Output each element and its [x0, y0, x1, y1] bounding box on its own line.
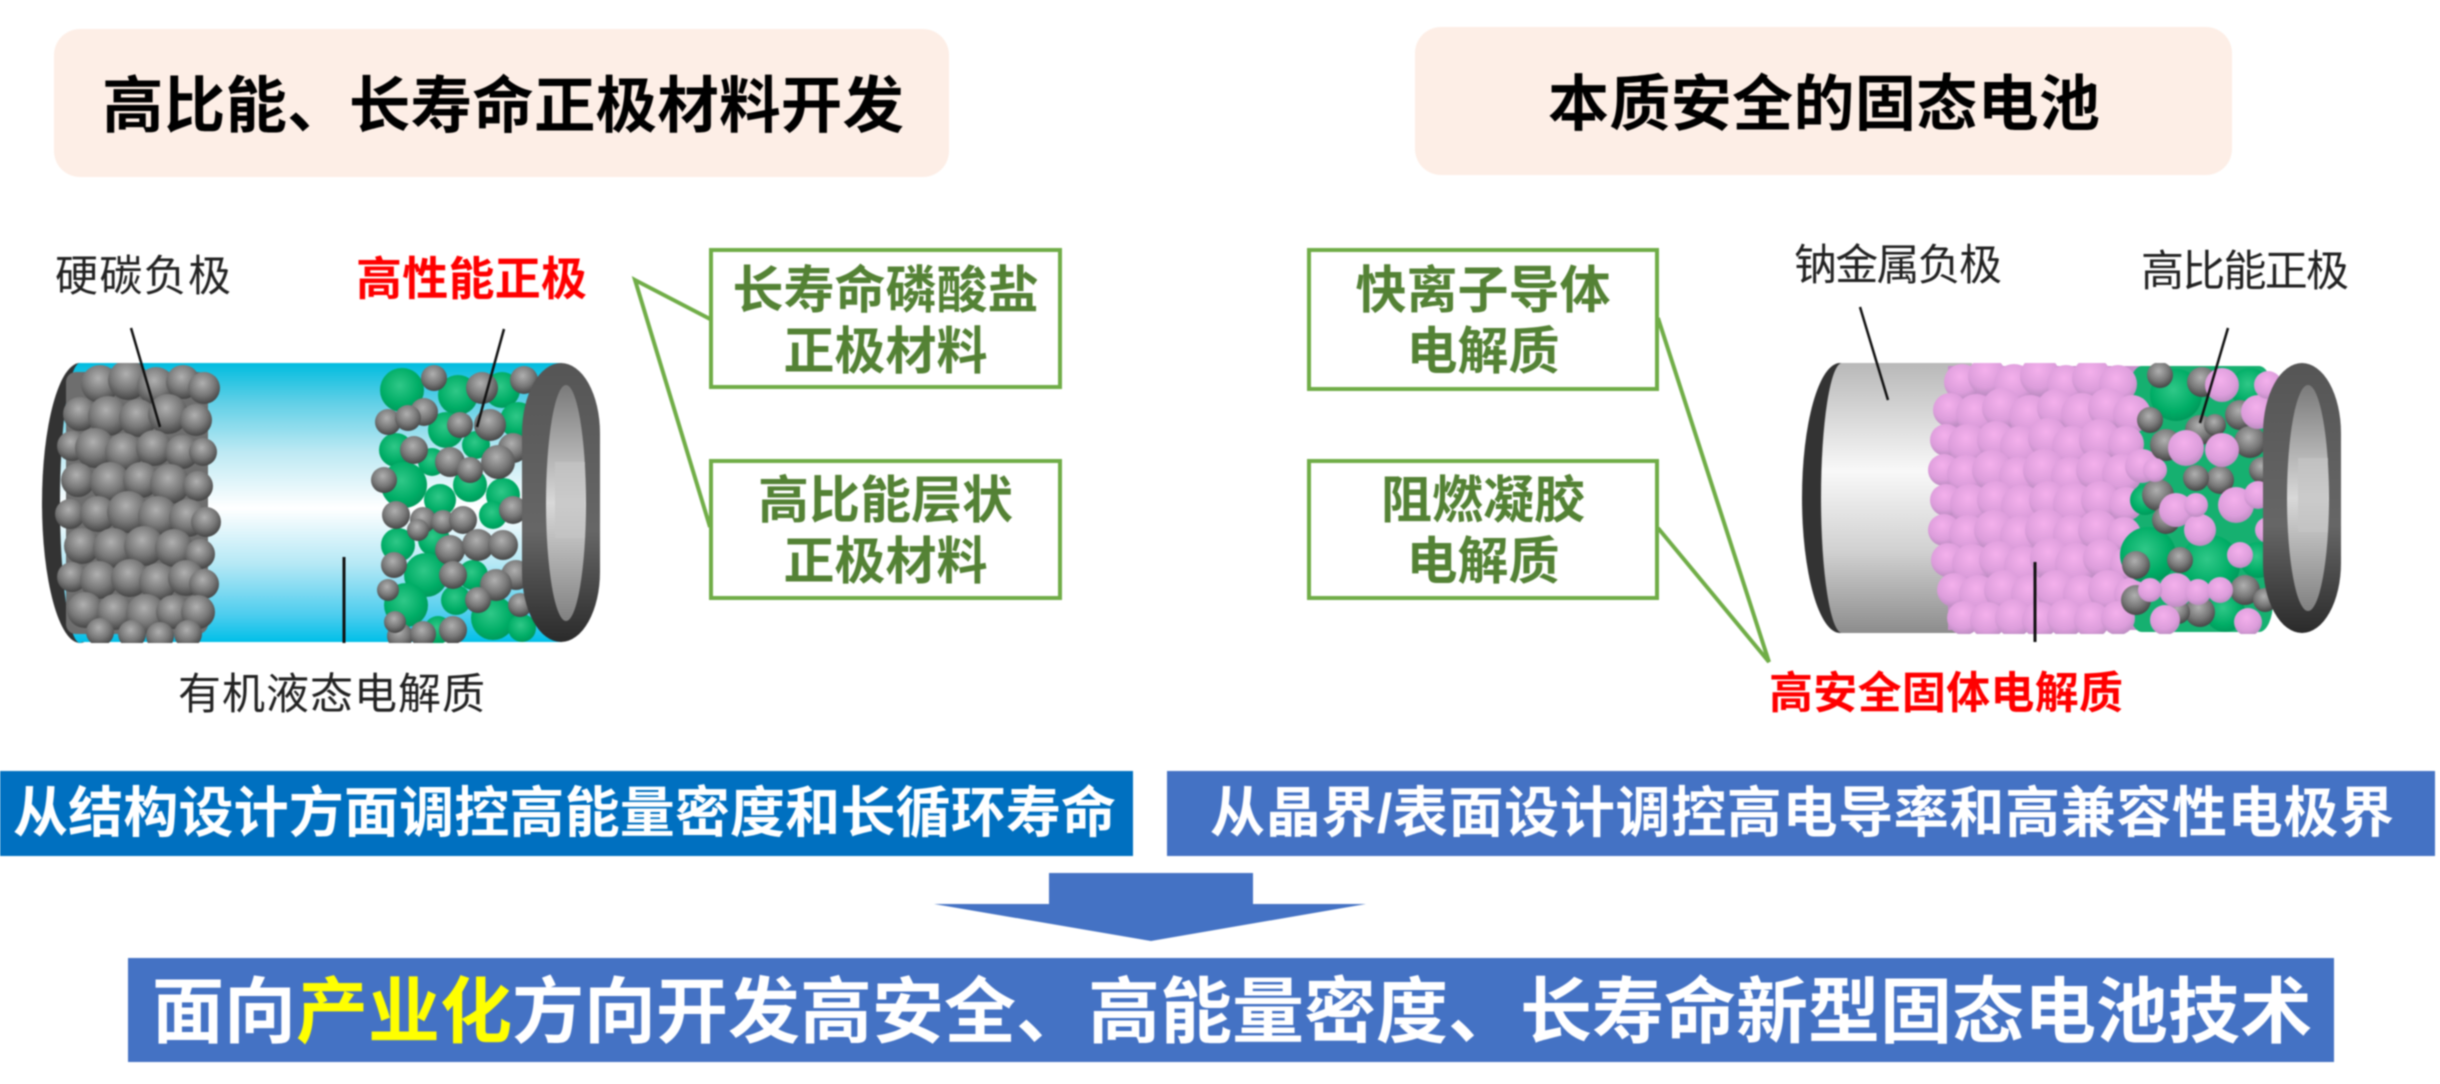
solid electrolyte particles: [1928, 356, 2159, 638]
battery left rim: [42, 363, 118, 643]
leader: solid electrolyte: [2034, 562, 2036, 642]
cathode particles: grey: [371, 365, 538, 649]
label: high specific energy cathode: 高比能正极: [2141, 248, 2349, 296]
label: hard carbon anode: 硬碳负极: [55, 253, 231, 301]
label: organic liquid electrolyte: 有机液态电解质: [178, 671, 485, 719]
callout: layered cathode: [711, 461, 1060, 598]
callout: phosphate cathode: 长寿命磷酸盐: [732, 262, 1039, 319]
callout: flame-retardant gel: [1309, 461, 1657, 598]
composite cathode backing: [2128, 366, 2273, 632]
label: high-safety solid electrolyte: 高安全固体电解质: [1769, 669, 2123, 718]
leader: electrolyte: [342, 557, 346, 643]
label: sodium metal anode: 钠金属负极: [1794, 242, 2002, 290]
callout: layered cathode: 正极材料: [783, 533, 988, 590]
banner: overall goal: 面向产业化方向开发高安全、高能量密度、长寿命新型固态电池技术: [152, 973, 2312, 1053]
label: high-performance cathode: 高性能正极: [356, 253, 587, 305]
heading: high-energy cathode development: 高比能、长寿命正极材料开发: [102, 72, 904, 141]
composite cathode particles: green: [2120, 368, 2276, 632]
diagram: solid-state battery: [1802, 307, 2341, 642]
arrow: down: [934, 873, 1366, 941]
callout: flame-retardant gel: 阻燃凝胶: [1381, 472, 1585, 529]
banner: grain boundary and surface design: 从晶界/表面设计调控高电导率和高兼容性电极界: [1210, 782, 2394, 844]
banner: grain boundary and surface design: [1167, 771, 2435, 856]
leader: anode: [131, 328, 160, 427]
diagram: liquid electrolyte battery: [42, 328, 600, 650]
banner: structural design: 从结构设计方面调控高能量密度和长循环寿命: [13, 782, 1116, 844]
battery right end cap: [522, 363, 600, 642]
heading: intrinsically safe solid-state battery: 本质安全的固态电池: [1548, 70, 2100, 138]
battery right end cap: [2263, 363, 2341, 633]
battery left rim: [1802, 363, 1878, 633]
heading: high-energy cathode development: [54, 29, 949, 177]
cathode particles: green: [379, 368, 536, 644]
solid electrolyte backing: [1948, 366, 2148, 630]
heading: intrinsically safe solid-state battery: [1415, 27, 2232, 175]
hard carbon anode backing: [66, 372, 208, 634]
callout: layered cathode: 高比能层状: [758, 472, 1013, 529]
composite cathode particles: grey and purple: [2121, 362, 2282, 636]
sodium metal anode: [1821, 363, 1972, 633]
hard carbon anode particles: [55, 360, 221, 650]
callout: phosphate cathode: 正极材料: [783, 323, 988, 380]
leader: high specific energy cathode: [2200, 328, 2228, 423]
callout pointer: cathode to materials: [635, 280, 710, 527]
callout: fast ion conductor: 快离子导体: [1355, 262, 1611, 319]
leader: sodium anode: [1860, 307, 1888, 400]
callout: fast ion conductor: 电解质: [1406, 323, 1560, 380]
callout: fast ion conductor: [1309, 250, 1657, 389]
callout: phosphate cathode: [711, 250, 1060, 387]
callout: flame-retardant gel: 电解质: [1406, 533, 1560, 590]
callout pointer: electrolytes to solid electrolyte: [1658, 318, 1769, 662]
liquid electrolyte: [60, 363, 562, 643]
leader: cathode: [477, 329, 504, 427]
